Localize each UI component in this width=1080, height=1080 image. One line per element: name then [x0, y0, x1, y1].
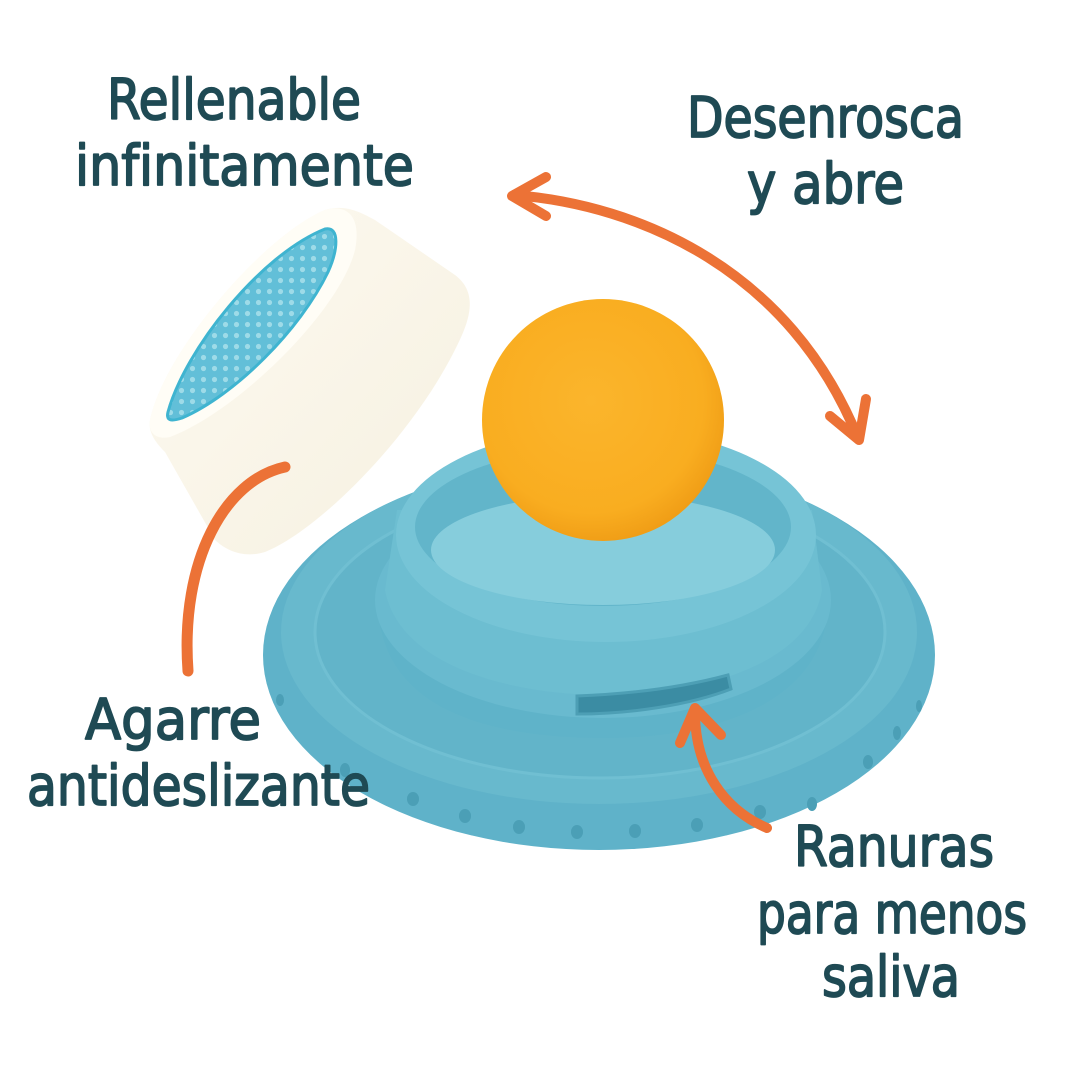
- label: unscrew and open: [687, 86, 964, 217]
- tower interior: [415, 448, 791, 606]
- white cup with blue textured interior: [150, 208, 470, 554]
- toy base: blue disc with tower: [263, 428, 935, 850]
- arrow: anti-slip grip: [187, 467, 285, 671]
- label: refillable: Rellenable: [107, 68, 361, 133]
- yellow ball: [482, 299, 724, 541]
- label: anti-slip grip: [27, 688, 370, 819]
- disc side rim: [263, 460, 935, 850]
- arrow: open and unscrew: [512, 177, 866, 440]
- label: anti-slip grip: antideslizante: [27, 754, 370, 819]
- label: slots for less saliva: Ranuras: [794, 815, 994, 880]
- arrow: slots: [680, 708, 767, 828]
- textured interior: [168, 229, 336, 420]
- label: unscrew and open: y abre: [747, 152, 904, 217]
- label: slots for less saliva: [757, 815, 1027, 1010]
- disc groove: [315, 486, 885, 778]
- label: unscrew and open: Desenrosca: [687, 86, 964, 151]
- label: anti-slip grip: Agarre: [85, 688, 261, 753]
- label: slots for less saliva: saliva: [822, 945, 960, 1010]
- label: slots for less saliva: para menos: [757, 882, 1027, 947]
- cup rim: [150, 208, 357, 438]
- tower rim: [396, 428, 816, 642]
- label: refillable: [75, 68, 414, 199]
- tower outer wall: [385, 510, 822, 695]
- cup body: [150, 208, 470, 554]
- disc top surface: [281, 460, 917, 804]
- label: refillable: infinitamente: [75, 134, 414, 199]
- tower lower step: [378, 600, 828, 738]
- rim dimples: [276, 694, 922, 839]
- side slot: [577, 675, 731, 714]
